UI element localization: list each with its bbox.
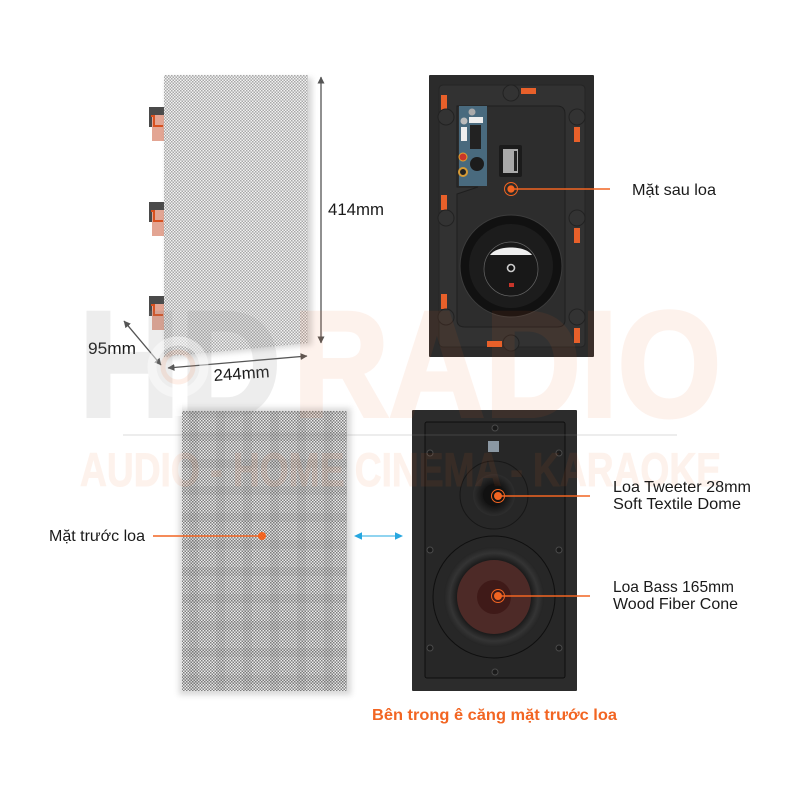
callout: tweeter: Soft Textile Dome [613,496,741,513]
dimension: width 244mm: 244mm [213,363,270,385]
callout: front of speaker [49,528,266,545]
dimension: depth 95mm: 95mm [88,340,136,358]
mounting clip: middle [149,202,164,236]
screws [427,425,562,675]
speaker back panel [429,75,594,357]
terminal block [499,145,522,177]
adjuster knobs [438,85,585,351]
callout: bass [492,579,738,613]
mounting clip: top [149,107,164,141]
caption: Bên trong ê căng mặt trước loa [372,707,617,724]
rear driver [460,215,562,317]
callout: tweeter: Loa Tweeter 28mm [613,479,751,496]
watermark: HD RADIO logo [79,280,721,496]
callout: front of speaker: Mặt trước loa [49,528,145,545]
dimension: depth 95mm [88,321,161,365]
mounting clip: bottom [149,296,164,330]
callout: back of speaker [504,182,716,199]
flat front grille [179,408,351,695]
dimension: width 244mm [168,356,307,385]
angled speaker grille with brackets [149,75,312,359]
watermark: HD RADIO logo: HD [79,280,281,448]
speaker front panel without grille [412,410,577,691]
arrow: grille to speaker [354,532,403,540]
orange clips [441,88,580,347]
callout: tweeter [492,479,751,513]
crossover board [459,106,487,186]
callout: bass: Wood Fiber Cone [613,596,738,613]
logo [488,441,499,452]
dimension: height 414mm: 414mm [328,201,384,219]
tweeter [460,461,528,529]
callout: back of speaker: Mặt sau loa [632,182,716,199]
watermark: HD RADIO logo: RADIO [293,280,721,448]
woofer [433,536,555,658]
callout: bass: Loa Bass 165mm [613,579,734,596]
